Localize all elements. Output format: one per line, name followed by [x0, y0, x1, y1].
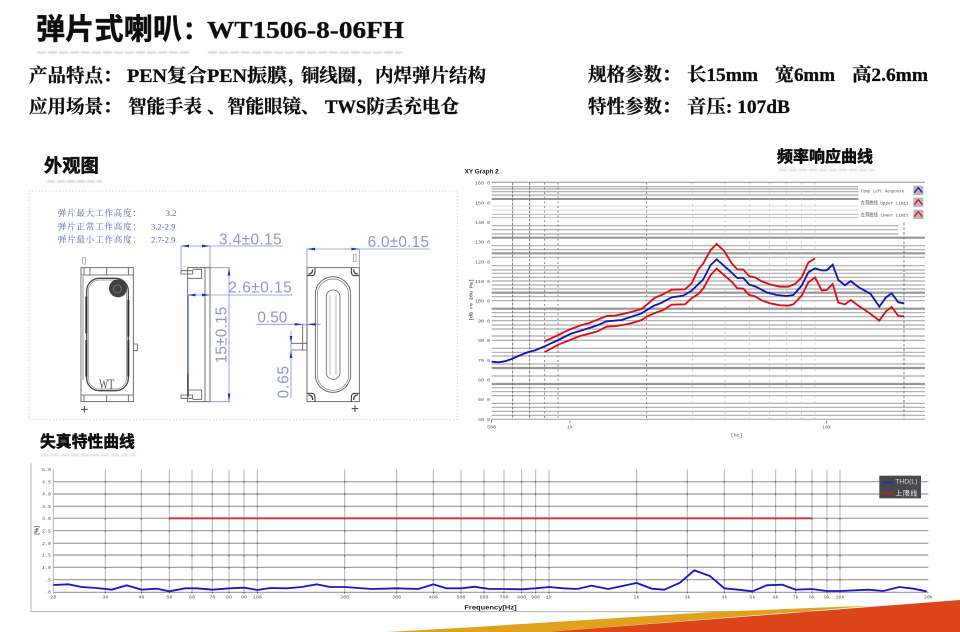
x axis labels: 20 — [50, 594, 56, 600]
x axis labels: 80 — [226, 594, 232, 600]
y axis labels: 90 0 — [478, 319, 490, 325]
curve: response — [492, 259, 904, 362]
curve: upper limit — [545, 244, 815, 341]
chart title: XY Graph 2 — [465, 169, 499, 176]
application scenarios line: 、 — [301, 98, 320, 118]
title — [36, 13, 404, 46]
dimension: 3.4: 3.4±0.15 — [219, 231, 282, 248]
x axis labels — [50, 594, 933, 600]
dimension: 3.4 — [181, 231, 283, 271]
panel border — [29, 191, 457, 419]
horizontal grid — [53, 482, 928, 592]
horizontal grid — [492, 182, 925, 419]
x axis labels: 600 — [480, 594, 488, 600]
y axis labels: 160 0 — [475, 181, 490, 187]
y axis labels: 140 0 — [475, 220, 490, 226]
y axis labels: 3.0 — [42, 516, 51, 522]
y axis labels: 120 0 — [475, 260, 490, 266]
right view: speaker back — [307, 254, 359, 412]
y axis labels: 80 0 — [478, 338, 490, 344]
y axis labels — [42, 467, 51, 595]
dimension: 15: 15±0.15 — [214, 307, 231, 363]
THD curve — [53, 570, 927, 591]
panel: outline drawing — [29, 191, 457, 419]
x axis labels: 1k — [546, 594, 552, 600]
characteristic parameters line: ： — [662, 98, 681, 118]
heading reflection: frequency response — [779, 169, 874, 171]
x axis labels: [Hz] — [731, 432, 743, 438]
dimension: 6.0: 6.0±0.15 — [368, 234, 429, 251]
dimension: 0.65 — [276, 331, 307, 398]
chart: frequency response — [465, 169, 925, 438]
dimension: 6.0 — [307, 234, 430, 268]
working height notes: 弹片最小工作高度： — [58, 233, 141, 244]
left view: speaker front — [81, 257, 137, 413]
y axis labels: 2.5 — [42, 528, 51, 534]
y axis labels: 150 0 — [475, 200, 490, 206]
y axis labels: 110 0 — [475, 279, 490, 285]
product features line — [29, 65, 486, 87]
y axis labels: 40 0 — [478, 417, 490, 423]
curve: lower limit — [545, 269, 904, 352]
x axis labels: 8k — [809, 594, 815, 600]
specification parameters line: 规格参数 — [588, 65, 662, 86]
x axis labels: 3k — [684, 594, 690, 600]
x axis title: Frequency[Hz] — [464, 605, 517, 611]
x axis labels: 300 — [392, 594, 401, 600]
left view: speaker front: WT — [99, 377, 115, 392]
y axis labels: 100 0 — [475, 299, 490, 305]
x axis labels: [dB re 20u Pa] — [468, 279, 474, 321]
legend: THD(L) — [895, 479, 917, 486]
title: 弹片式喇叭 — [36, 13, 182, 46]
application scenarios line: TWS防丢充电仓 — [325, 97, 459, 118]
x axis labels: 10k — [822, 425, 831, 431]
specification parameters line: 宽6mm — [775, 64, 836, 86]
vertical grid — [53, 469, 840, 593]
y axis labels: 4.5 — [42, 479, 51, 485]
y axis labels: 1.5 — [42, 553, 51, 559]
y axis labels: 130 0 — [475, 240, 490, 246]
characteristic parameters line: 特性参数 — [588, 97, 662, 118]
y axis title: [%] — [34, 526, 40, 535]
legend — [879, 476, 921, 498]
characteristic parameters line: 音压: 107dB — [687, 97, 790, 118]
chart frame — [31, 463, 933, 612]
title: WT1506-8-06FH — [207, 18, 404, 44]
x axis labels: 10k — [835, 594, 844, 600]
x axis labels: 90 — [241, 594, 247, 600]
application scenarios line — [29, 96, 459, 118]
application scenarios line: ： — [103, 98, 122, 118]
x axis labels: 7k — [793, 594, 799, 600]
dimension: 2.6 — [188, 280, 293, 297]
x axis labels: 700 — [500, 594, 508, 600]
middle view: speaker side — [181, 268, 210, 402]
specification parameters line — [588, 64, 929, 86]
working height notes: 2.7-2.9 — [151, 234, 176, 244]
chart: distortion — [31, 463, 933, 612]
x axis labels: 4k — [721, 594, 727, 600]
limit line — [169, 516, 812, 521]
legend: 左耳曲线 Upper Limit — [861, 199, 909, 206]
title: ： — [183, 17, 208, 45]
dimension: 0.50 — [257, 309, 321, 350]
working height notes — [58, 207, 176, 244]
heading reflection: appearance — [47, 180, 102, 182]
working height notes: 3.2-2.9 — [151, 221, 176, 231]
x axis labels: 20k — [924, 594, 933, 600]
dimension: 0.50: 0.50 — [257, 309, 287, 326]
vertical grid — [492, 183, 904, 423]
product features line: 内焊弹片结构 — [375, 65, 486, 87]
x axis labels: 200 — [340, 594, 349, 600]
x axis labels: 2k — [634, 594, 640, 600]
footer band: orange-red — [547, 600, 960, 632]
x axis labels: 50 — [166, 594, 172, 600]
specification parameters line: 高2.6mm — [852, 64, 929, 86]
dimension: 2.6: 2.6±0.15 — [228, 280, 292, 297]
grid crossing ticks — [105, 481, 840, 593]
x axis labels: 60 — [189, 594, 195, 600]
y axis labels: .5 — [45, 577, 51, 583]
heading: appearance drawing: 外观图 — [44, 155, 99, 176]
title reflection — [37, 52, 402, 54]
heading: distortion: 失真特性曲线 — [40, 432, 135, 451]
application scenarios line: 应用场景 — [29, 97, 103, 118]
product features line: ： — [103, 67, 122, 87]
product features line: 铜线圈 — [301, 66, 356, 87]
application scenarios line: 智能眼镜 — [227, 96, 301, 118]
y axis labels: 50 0 — [478, 397, 490, 403]
heading reflection: distortion — [41, 454, 136, 456]
product features line: 产品特点 — [29, 66, 104, 87]
x axis labels: 70 — [209, 594, 215, 600]
y axis labels: 4.0 — [42, 492, 51, 498]
x axis labels: 30 — [102, 594, 108, 600]
x axis labels: 40 — [138, 594, 144, 600]
application scenarios line: 、 — [207, 98, 226, 118]
x axis labels — [468, 279, 831, 438]
y axis labels: 70 0 — [478, 358, 490, 364]
heading: frequency response: 频率响应曲线 — [777, 147, 873, 166]
legend: 上限线 — [895, 488, 917, 497]
product features line: PEN复合PEN振膜 — [127, 66, 287, 87]
working height notes: 弹片正常工作高度： — [58, 220, 141, 231]
x axis labels: 900 — [531, 594, 540, 600]
x axis labels: 500 — [457, 594, 465, 600]
legend: Temp Left Response — [861, 188, 904, 194]
working height notes: 3.2 — [166, 208, 176, 218]
legend — [861, 186, 923, 219]
y axis labels: 3.5 — [42, 504, 51, 510]
dimension: 15 — [210, 268, 231, 402]
working height notes: 弹片最大工作高度： — [58, 207, 141, 218]
x axis labels: 1k — [567, 425, 573, 431]
y axis labels — [475, 181, 490, 423]
y axis labels: 2.0 — [42, 541, 51, 547]
characteristic parameters line — [588, 97, 790, 118]
product features line: ， — [288, 67, 307, 87]
x axis labels: 100 — [253, 594, 262, 600]
x axis labels: 5k — [749, 594, 755, 600]
x axis labels: 800 — [517, 594, 526, 600]
legend: 左耳曲线 Lower Limit — [861, 211, 909, 218]
specification parameters line: 长15mm — [687, 65, 759, 86]
specification parameters line: ： — [662, 66, 681, 86]
y axis labels: 1.0 — [42, 565, 51, 571]
x axis labels: 9k — [824, 594, 830, 600]
x axis labels: 500 — [487, 425, 496, 431]
x axis labels: 6k — [773, 594, 779, 600]
y axis labels: .0 — [45, 589, 51, 595]
dimension: 0.65: 0.65 — [276, 366, 293, 398]
y axis labels: 5.0 — [42, 467, 51, 473]
x axis labels: 400 — [429, 594, 438, 600]
application scenarios line: 智能手表 — [128, 96, 202, 118]
y axis labels: 60 0 — [478, 378, 490, 384]
product features line: ， — [357, 67, 376, 87]
footer band: yellow — [387, 606, 870, 632]
